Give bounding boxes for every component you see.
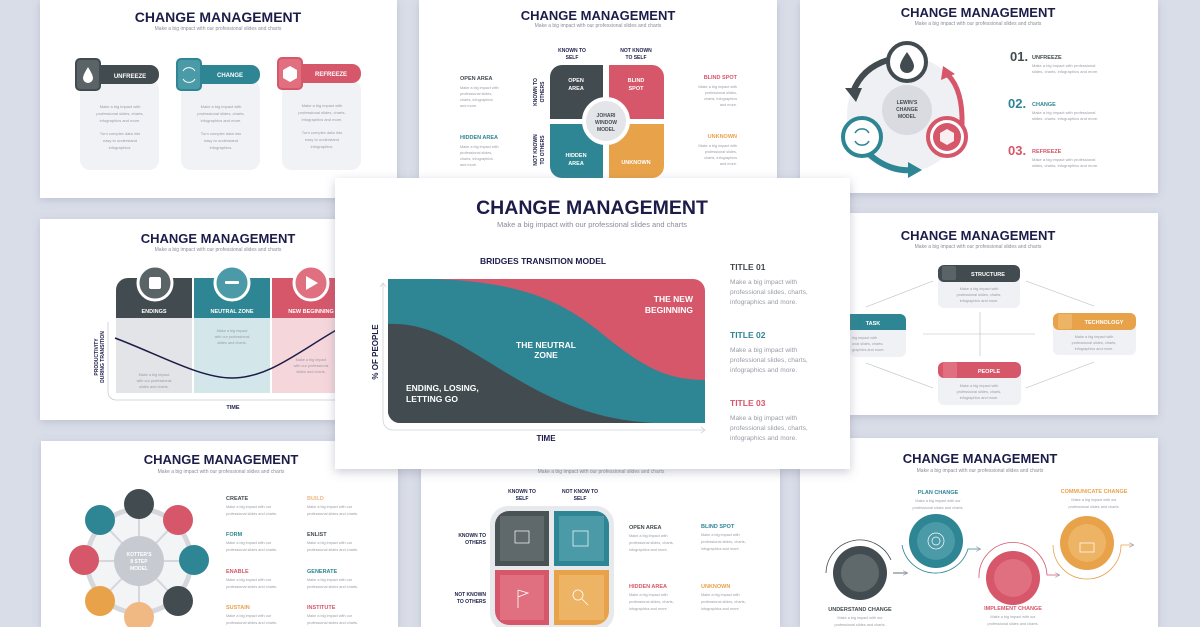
list: steps: professional slides and charts. (307, 585, 358, 589)
card: refreeze: REFREEZE (315, 72, 347, 78)
card: refreeze: infographics and more. (302, 117, 342, 122)
axis labels: SELF (574, 496, 586, 502)
list: steps: slides, charts, infographics and more. (1032, 116, 1098, 121)
text: side descriptions: UNKNOWN (708, 134, 737, 140)
text: descriptions: UNKNOWN (701, 584, 730, 590)
text: descriptions: BLIND SPOT (701, 524, 735, 530)
list: steps: Make a big impact with our (226, 614, 272, 618)
text: side descriptions: Make a big impact with (460, 86, 499, 90)
slide: lewin cycle: Make a big impact with our professional slides and charts (915, 21, 1042, 27)
cycle diagram (843, 43, 966, 178)
card: change: infographics. (210, 145, 232, 150)
johari grid: OPEN (568, 78, 584, 84)
text: titles: TITLE 01 (730, 262, 766, 272)
card: change: professional slides, charts, (197, 111, 245, 116)
card: unfreeze: Turn complex data into (100, 131, 141, 136)
step labels: Make a big impact with our (915, 499, 961, 503)
columns: slides and charts. (296, 370, 326, 374)
text: side descriptions: and more. (720, 103, 737, 107)
columns: slides and charts. (217, 341, 247, 345)
slide: kotter 8 step: Make a big impact with our professional slides and charts (158, 469, 285, 475)
list: steps: ENLIST (307, 532, 327, 538)
chart: transition areas: THE NEW (654, 294, 694, 304)
list: steps: professional slides and charts. (226, 512, 277, 516)
text: side descriptions (460, 75, 738, 167)
list: steps: ENABLE (226, 569, 249, 575)
text: titles: infographics and more. (730, 299, 797, 306)
axis labels (533, 48, 652, 166)
list: steps: slides, charts, infographics and more. (1032, 69, 1098, 74)
list: steps: professional slides and charts. (226, 621, 277, 625)
axis labels: OTHERS (465, 540, 487, 546)
johari grid: AREA (568, 161, 584, 167)
card: people (938, 362, 1021, 405)
axis labels: TO SELF (625, 55, 647, 61)
axis labels: KNOWN TO (458, 533, 486, 539)
slide: bridges productivity curve (40, 219, 350, 420)
slide: change model diamond (800, 213, 1158, 415)
text: side descriptions: BLIND SPOT (704, 75, 738, 81)
text: titles: Make a big impact with (730, 347, 797, 354)
step labels: Make a big impact with our (990, 615, 1036, 619)
slide: johari window top (419, 0, 777, 178)
list: steps: Make a big impact with our (307, 541, 353, 545)
columns: Make a big impact (139, 373, 170, 377)
step labels: UNDERSTAND CHANGE (828, 607, 892, 613)
text: side descriptions: and more. (460, 104, 477, 108)
card: task: graphics and more. (852, 348, 885, 352)
columns: NEW BEGINNING (288, 309, 334, 315)
list: steps: professional slides and charts. (226, 585, 277, 589)
card: technology (1053, 313, 1136, 355)
card: task (850, 314, 906, 357)
axis labels: KNOWN TO (508, 489, 536, 495)
text: descriptions: Make a big impact with (701, 593, 740, 597)
kotter wheel: KOTTER'S (126, 552, 152, 558)
text: titles: TITLE 03 (730, 398, 766, 408)
card: refreeze: Turn complex data into (302, 130, 343, 135)
slide: lewin cards: Make a big impact with our professional slides and charts (155, 26, 282, 32)
chart: transition areas: THE NEUTRAL (516, 340, 576, 350)
johari grid: HIDDEN (565, 153, 587, 159)
list: steps (1008, 49, 1098, 168)
slide: bridges productivity curve: Make a big impact with our professional slides and charts (155, 247, 282, 253)
curve (115, 325, 345, 378)
text: titles: Make a big impact with (730, 279, 797, 286)
text: side descriptions: OPEN AREA (460, 76, 493, 82)
list: steps: Make a big impact with professional (1032, 110, 1095, 115)
list: steps: Make a big impact with our (226, 505, 272, 509)
card: structure: infographics and more. (960, 299, 998, 303)
text: descriptions: infographics and more. (629, 548, 668, 552)
columns: NEUTRAL ZONE (211, 309, 254, 315)
text: descriptions: professional slides, charts, (629, 541, 674, 545)
columns: slides and charts. (139, 385, 169, 389)
step labels: IMPLEMENT CHANGE (984, 606, 1042, 612)
text: side descriptions: professional slides, (460, 92, 492, 96)
card: technology: professional slides, charts, (1072, 341, 1116, 345)
slide: lewin cycle (800, 0, 1158, 193)
axis labels: SELF (516, 496, 528, 502)
text: titles (730, 262, 808, 442)
johari grid: AREA (568, 86, 584, 92)
chart: transition areas: ZONE (534, 350, 558, 360)
step labels: COMMUNICATE CHANGE (1061, 489, 1128, 495)
list: steps: slides, charts, infographics and more. (1032, 163, 1098, 168)
subtitle: Make a big impact with our professional slides and charts (497, 220, 687, 229)
axis labels: TO OTHERS (457, 599, 487, 605)
text: side descriptions: and more. (720, 162, 737, 166)
axis labels (455, 489, 598, 605)
chart: transition areas: LETTING GO (406, 394, 458, 404)
list: steps: INSTITUTE (307, 605, 336, 611)
text: descriptions: professional slides, charts, (629, 600, 674, 604)
list: steps: professional slides and charts. (307, 621, 358, 625)
text: titles: TITLE 02 (730, 330, 766, 340)
axes: PRODUCTIVITY (94, 338, 100, 376)
text: descriptions: infographics and more. (701, 607, 740, 611)
list: steps: 03. (1008, 143, 1026, 158)
list: steps: REFREEZE (1032, 149, 1062, 155)
johari grid: SPOT (629, 86, 644, 92)
card: structure: professional slides, charts, (957, 293, 1001, 297)
card: change: Make a big impact with (201, 104, 241, 109)
text: descriptions: Make a big impact with (629, 593, 668, 597)
panel: center bridges transition model (335, 178, 850, 469)
card: unfreeze: professional slides, charts, (96, 111, 144, 116)
chart: transition areas: ENDING, LOSING, (406, 383, 479, 393)
subtitle: Make a big impact with our professional slides and charts (538, 469, 665, 475)
text: side descriptions: professional slides, (460, 151, 492, 155)
text: side descriptions: professional slides, (705, 150, 737, 154)
card: technology: Make a big impact with (1075, 335, 1113, 339)
slide: change process steps (800, 438, 1158, 627)
heading: CHANGE MANAGEMENT (901, 228, 1055, 243)
card: task: big impact with (852, 336, 877, 340)
axis labels: OTHERS (540, 81, 546, 102)
card: unfreeze: infographics and more. (100, 118, 140, 123)
heading: CHANGE MANAGEMENT (903, 451, 1057, 466)
card: unfreeze: UNFREEZE (114, 74, 146, 80)
cycle diagram: CHANGE (896, 107, 918, 113)
card: structure: Make a big impact with (960, 287, 998, 291)
list: steps: Make a big impact with our (307, 505, 353, 509)
card: structure (938, 265, 1020, 308)
text: titles: professional slides, charts, (730, 357, 808, 364)
axes: TIME (536, 434, 556, 443)
text: side descriptions: professional slides, (705, 91, 737, 95)
chart: transition areas (388, 279, 705, 423)
text: side descriptions: Make a big impact with (460, 145, 499, 149)
text: descriptions: Make a big impact with (629, 534, 668, 538)
axis labels: SELF (566, 55, 578, 61)
columns: with our professional (215, 335, 250, 339)
card: unfreeze: Make a big impact with (100, 104, 140, 109)
columns (116, 266, 350, 393)
axes (94, 322, 340, 411)
list: steps: Make a big impact with professional (1032, 157, 1095, 162)
step labels: professional slides and charts. (987, 622, 1039, 626)
card: people: infographics and more. (960, 396, 998, 400)
heading: CHANGE MANAGEMENT (144, 452, 298, 467)
axes: DURING TRANSITION (100, 331, 106, 383)
slide: change process steps: Make a big impact with our professional slides and charts (917, 468, 1044, 474)
axis labels: KNOWN TO (533, 78, 539, 106)
chart: transition areas: BEGINNING (645, 305, 693, 315)
johari grid (550, 65, 664, 178)
axes: TIME (226, 405, 240, 411)
list: steps: Make a big impact with our (307, 578, 353, 582)
axis labels: NOT KNOW TO (562, 489, 598, 495)
list: steps: 02. (1008, 96, 1026, 111)
list: steps: 01. (1010, 49, 1028, 64)
johari grid: JOHARI (597, 113, 616, 119)
text: side descriptions: Make a big impact with (698, 144, 737, 148)
kotter wheel: MODEL (130, 566, 148, 572)
card: change (177, 59, 260, 170)
card: task: TASK (866, 321, 880, 327)
text: titles: infographics and more. (730, 367, 797, 374)
card: people: Make a big impact with (960, 384, 998, 388)
card: refreeze: professional slides, charts, (298, 110, 346, 115)
text: side descriptions: charts, infographics (704, 97, 737, 101)
card: unfreeze: easy to understand (103, 138, 137, 143)
kotter wheel: 8 STEP (130, 559, 148, 565)
step labels: PLAN CHANGE (918, 490, 958, 496)
card: refreeze (278, 58, 361, 170)
card: task: onal slides, charts, (852, 342, 883, 346)
text: descriptions: infographics and more. (701, 547, 740, 551)
step labels: Make a big impact with our (1071, 498, 1117, 502)
card: change: Turn complex data into (201, 131, 242, 136)
columns: ENDINGS (141, 309, 167, 315)
list: steps: CHANGE (1032, 102, 1056, 108)
step labels (828, 489, 1128, 627)
list: steps: CREATE (226, 496, 249, 502)
text: titles: infographics and more. (730, 435, 797, 442)
slide: change model diamond: Make a big impact with our professional slides and charts (915, 244, 1042, 250)
text: titles: professional slides, charts, (730, 425, 808, 432)
text: titles: professional slides, charts, (730, 289, 808, 296)
kotter wheel (69, 489, 209, 627)
chart title: BRIDGES TRANSITION MODEL (480, 256, 606, 266)
johari grid: UNKNOWN (621, 160, 651, 166)
cycle diagram: MODEL (898, 114, 916, 120)
card: refreeze: easy to understand (305, 137, 339, 142)
text: descriptions: OPEN AREA (629, 525, 662, 531)
card: people: PEOPLE (978, 369, 1000, 375)
text: side descriptions: and more. (460, 163, 477, 167)
list: steps: professional slides and charts. (307, 548, 358, 552)
quadrant grid (490, 506, 614, 627)
slide: johari window bottom (421, 460, 780, 627)
text: side descriptions: Make a big impact with (698, 85, 737, 89)
step labels: professional slides and charts. (912, 506, 964, 510)
columns: with our professional (294, 364, 329, 368)
list: steps: Make a big impact with our (226, 578, 272, 582)
list: steps: GENERATE (307, 569, 337, 575)
connectors (866, 281, 1094, 388)
text: side descriptions: charts, infographics (704, 156, 737, 160)
columns: Make a big impact (296, 358, 327, 362)
card: change: easy to understand (204, 138, 238, 143)
text: descriptions: professional slides, charts, (701, 540, 746, 544)
card: technology: TECHNOLOGY (1085, 320, 1124, 326)
slide: kotter 8 step (41, 441, 398, 627)
axes (371, 283, 705, 443)
list: steps: Make a big impact with our (226, 541, 272, 545)
heading: CHANGE MANAGEMENT (135, 9, 302, 25)
card: people: professional slides, charts, (957, 390, 1001, 394)
card: unfreeze: infographics. (109, 145, 131, 150)
list: steps (226, 496, 358, 625)
list: steps: SUSTAIN (226, 605, 250, 611)
heading: CHANGE MANAGEMENT (521, 8, 675, 23)
johari grid: MODEL (597, 127, 615, 133)
text: titles: Make a big impact with (730, 415, 797, 422)
johari grid: BLIND (628, 78, 644, 84)
card: change: CHANGE (217, 73, 243, 79)
card: refreeze: infographics. (311, 144, 333, 149)
step labels: professional slides and charts. (1068, 505, 1120, 509)
axes: % OF PEOPLE (371, 324, 380, 380)
slide: lewin cards (40, 0, 397, 198)
step labels: professional slides and charts. (834, 623, 886, 627)
slide: johari window top: Make a big impact with our professional slides and charts (535, 23, 662, 29)
list: steps: Make a big impact with professional (1032, 63, 1095, 68)
step labels: Make a big impact with our (837, 616, 883, 620)
text: descriptions (629, 524, 746, 611)
text: side descriptions: HIDDEN AREA (460, 135, 498, 141)
card: technology: infographics and more. (1075, 347, 1113, 351)
axis labels: KNOWN TO (558, 48, 586, 54)
text: descriptions: professional slides, charts, (701, 600, 746, 604)
step circles (826, 514, 1133, 605)
text: descriptions: infographics and more. (629, 607, 668, 611)
card: refreeze: Make a big impact with (302, 103, 342, 108)
list: steps: professional slides and charts. (307, 512, 358, 516)
columns: Make a big impact (217, 329, 248, 333)
text: descriptions: HIDDEN AREA (629, 584, 667, 590)
axis labels: NOT KNOWN (455, 592, 486, 598)
columns: with our professional (137, 379, 172, 383)
list: steps: UNFREEZE (1032, 55, 1062, 61)
card: structure: STRUCTURE (971, 272, 1005, 278)
card: unfreeze (76, 59, 159, 170)
heading: CHANGE MANAGEMENT (141, 231, 295, 246)
list: steps: BUILD (307, 496, 324, 502)
axis labels: NOT KNOWN (620, 48, 652, 54)
axis labels: NOT KNOWN (533, 134, 539, 166)
title: CHANGE MANAGEMENT (476, 197, 708, 219)
list: steps: FORM (226, 532, 243, 538)
text: descriptions: Make a big impact with (701, 533, 740, 537)
cycle diagram: LEWIN'S (897, 100, 918, 106)
text: side descriptions: charts, infographics (460, 157, 493, 161)
text: side descriptions: charts, infographics (460, 98, 493, 102)
johari grid: WINDOW (595, 120, 617, 126)
list: steps: professional slides and charts. (226, 548, 277, 552)
axis labels: TO OTHERS (540, 135, 546, 165)
card: change: infographics and more. (201, 118, 241, 123)
list: steps: Make a big impact with our (307, 614, 353, 618)
heading: CHANGE MANAGEMENT (901, 5, 1055, 20)
